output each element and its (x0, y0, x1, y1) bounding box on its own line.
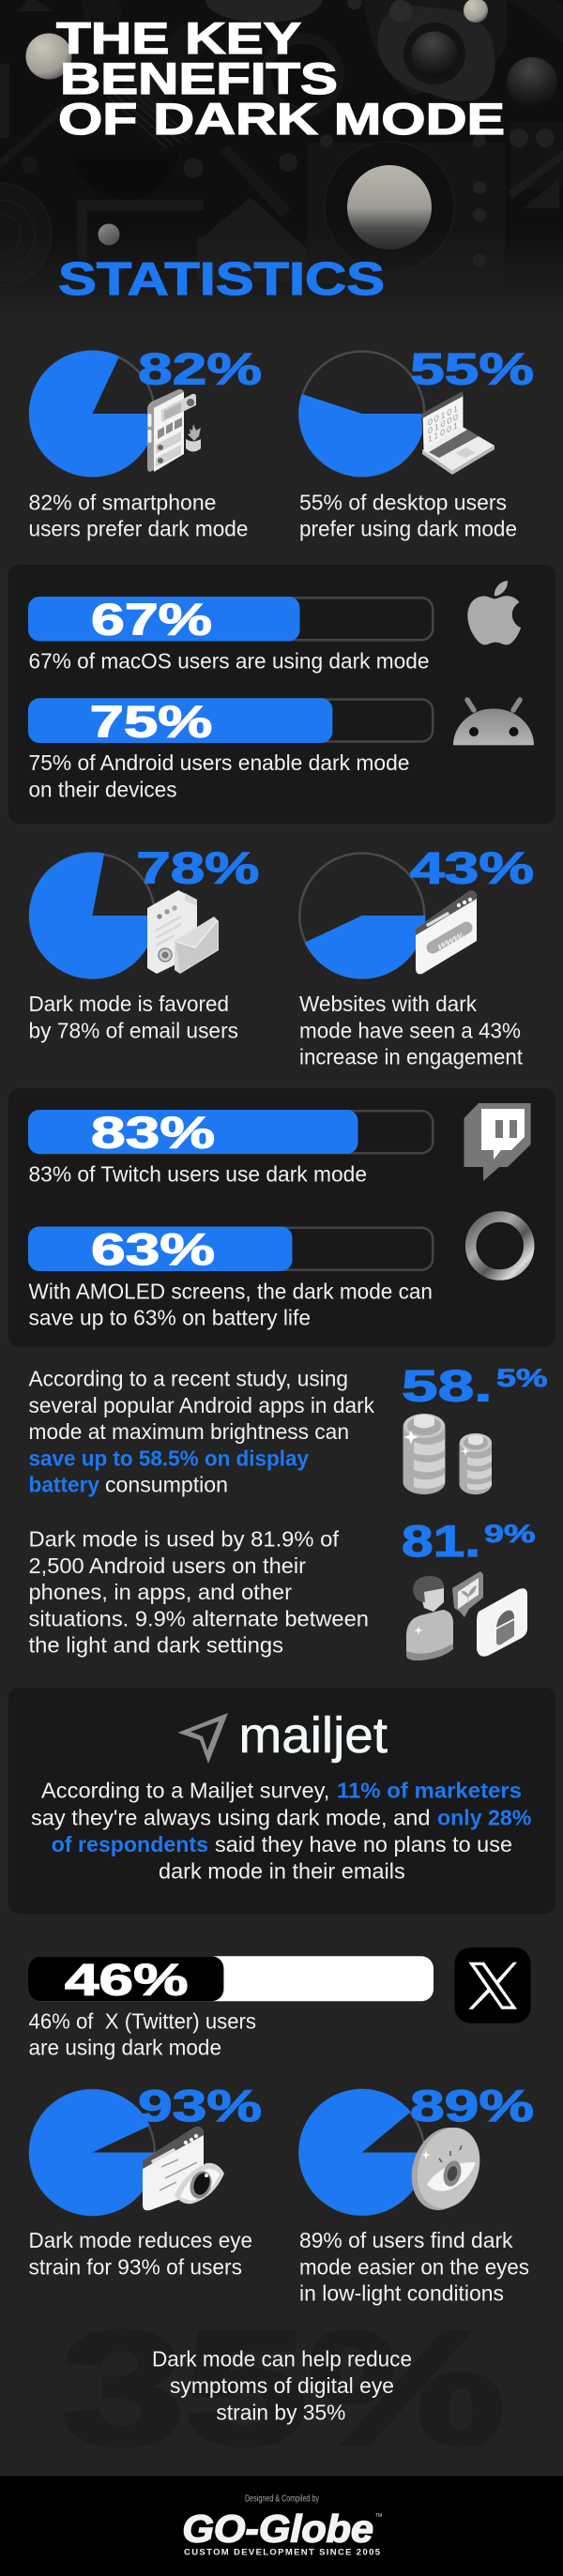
bar: 67% macOS (28, 595, 433, 644)
stat text: 82%: users prefer dark mode (28, 517, 248, 541)
bar: 46% X users (28, 1955, 434, 2005)
text block: display battery study: According to a recent study, using (28, 1366, 348, 1390)
text: 83% Twitch: 83% of Twitch users use dark mode (28, 1161, 367, 1186)
stat text: 43% (299, 992, 523, 1069)
icon: AMOLED ring (471, 1217, 529, 1275)
text block: display battery study: several popular Android apps in dark (28, 1393, 374, 1417)
text block: Android users 81.9%: phones, in apps, and other (28, 1580, 292, 1604)
icon: twitch (464, 1103, 531, 1181)
icon: eye disc (402, 2119, 490, 2219)
stat text: 89%: 89% of users find dark (299, 2228, 513, 2252)
stat text: 82% (28, 490, 248, 541)
figure: 58.5% (402, 1360, 548, 1411)
text block: display battery study: consumption (105, 1472, 228, 1496)
text: 75% Android: on their devices (28, 777, 176, 801)
icon: batteries (403, 1414, 492, 1494)
stat text: 78%: by 78% of email users (28, 1018, 238, 1042)
stat text: 93% (28, 2228, 252, 2279)
icon: person with android tile (406, 1571, 527, 1660)
icon: browser window (416, 891, 477, 974)
text block: Android users 81.9%: situations. 9.9% alternate between (28, 1606, 369, 1630)
icon: code window with eye (143, 2127, 224, 2210)
stat: 78% email users: 78% (136, 843, 259, 893)
text: 46% X users (28, 2009, 256, 2060)
stat text: 55%: 55% of desktop users (299, 490, 507, 514)
stat text: 43%: increase in engagement (299, 1045, 523, 1069)
text: 75% Android (28, 750, 409, 801)
stat text: 55% (299, 490, 517, 541)
stat: 78% email users (29, 843, 259, 978)
text: 63% AMOLED: save up to 63% on battery life (28, 1305, 311, 1329)
heading: statistics: STATISTICS (58, 254, 385, 305)
stat text: 89%: in low-light conditions (299, 2281, 504, 2306)
icon: apple (467, 581, 521, 644)
text block: display battery study: mode at maximum brightness can (28, 1419, 349, 1444)
stat text: 93%: strain for 93% of users (28, 2254, 242, 2279)
icon: document and envelope (147, 890, 219, 974)
text: 63% AMOLED (28, 1280, 433, 1329)
text block: display battery study: save up to 58.5% on display (28, 1446, 309, 1470)
text: survey: said they have no plans to use (215, 1832, 512, 1856)
bar: 63% AMOLED (28, 1224, 433, 1274)
panel: Mailjet survey (8, 1688, 555, 1914)
text: survey: of respondents (52, 1832, 208, 1856)
logo: GO-Globe: GO-Globe (182, 2507, 373, 2550)
text block: Android users 81.9% (28, 1527, 369, 1657)
icon: laptop: 11001 (428, 420, 458, 446)
stat: 89% low-light (298, 2081, 534, 2219)
panel: Twitch and AMOLED (8, 1088, 555, 1347)
stat text: 78%: Dark mode is favored (28, 992, 229, 1016)
bar: 67% macOS: 67% (91, 595, 212, 644)
text: digital eye strain: symptoms of digital eye (170, 2373, 394, 2398)
text: digital eye strain: Dark mode can help reduce (152, 2347, 412, 2371)
text: survey: dark mode in their emails (159, 1858, 405, 1883)
icon: laptop (421, 391, 495, 475)
stat: 93% eye strain: 93% (138, 2081, 262, 2130)
icon: smartphone (147, 389, 201, 472)
figure: 81.9%: 81. (402, 1516, 480, 1566)
logo: GO-Globe: CUSTOM DEVELOPMENT SINCE 2005 (184, 2547, 381, 2557)
text: survey (31, 1779, 531, 1883)
bar: 63% AMOLED: 63% (91, 1224, 215, 1274)
stat text: 89% (299, 2228, 529, 2306)
watermark: 35%: 35% (61, 2298, 505, 2478)
text: survey: 11% of marketers (337, 1779, 522, 1803)
icon: browser window: www. (437, 928, 464, 953)
stat: 55% desktop users (298, 343, 534, 477)
stat: 82% smartphone users: 82% (138, 343, 262, 394)
text: 67% macOS: 67% of macOS users are using dark mode (28, 649, 430, 674)
icon: android (453, 700, 534, 745)
stat: 89% low-light: 89% (410, 2081, 534, 2130)
title: BENEFITS (60, 53, 338, 103)
text block: Android users 81.9%: Dark mode is used by 81.9% of (28, 1527, 339, 1552)
stat: 93% eye strain (29, 2081, 262, 2216)
text: survey: say they're always using dark mode, and (31, 1806, 431, 1830)
text block: display battery study: battery (28, 1472, 99, 1496)
text: digital eye strain: strain by 35% (216, 2400, 345, 2424)
figure: 58.5%: 5% (496, 1364, 548, 1392)
stat text: 89%: mode easier on the eyes (299, 2254, 529, 2279)
bar: 75% Android (28, 697, 433, 747)
stat text: 82%: 82% of smartphone (28, 490, 216, 514)
text: digital eye strain (152, 2347, 412, 2424)
icon: X logo (454, 1947, 531, 2023)
text block: Android users 81.9%: 2,500 Android users on their (28, 1553, 306, 1578)
text: survey: only 28% (437, 1806, 531, 1830)
stat: 43% website engagement: 43% (410, 843, 534, 893)
bar: 83% Twitch (28, 1108, 433, 1158)
text: 46% X users: are using dark mode (28, 2036, 221, 2060)
panel: macOS and Android (8, 565, 555, 824)
logo: GO-Globe: TM (375, 2513, 382, 2519)
title: OF DARK MODE (58, 94, 505, 144)
title: THE KEY (56, 13, 301, 63)
text: 63% AMOLED: With AMOLED screens, the dark mode can (28, 1280, 433, 1304)
text block: Android users 81.9%: the light and dark settings (28, 1632, 283, 1657)
bar: 75% Android: 75% (90, 697, 212, 747)
footer credit: Designed & Compiled by (245, 2494, 319, 2505)
bar: 83% Twitch: 83% (91, 1108, 215, 1158)
text: 46% X users: 46% of X (Twitter) users (28, 2009, 256, 2034)
icon: laptop: 01000 (428, 412, 458, 437)
text block: display battery study (28, 1366, 374, 1496)
bar: 46% X users: 46% (65, 1955, 188, 2005)
figure: 81.9% (402, 1516, 535, 1566)
stat text: 93%: Dark mode reduces eye (28, 2228, 252, 2252)
stat text: 43%: Websites with dark (299, 992, 477, 1016)
text: 75% Android: 75% of Android users enable dark mode (28, 750, 409, 775)
figure: 58.5%: 58. (402, 1360, 492, 1411)
title (56, 13, 505, 144)
stat text: 55%: prefer using dark mode (299, 517, 517, 541)
header decorative background (0, 0, 563, 326)
stat: 55% desktop users: 55% (410, 343, 534, 394)
stat text: 78% (28, 992, 238, 1042)
stat text: 43%: mode have seen a 43% (299, 1018, 521, 1042)
figure: 81.9%: 9% (484, 1520, 535, 1548)
logo: mailjet (177, 1707, 388, 1764)
stat: 43% website engagement (299, 843, 534, 979)
icon: laptop: 00101 (428, 403, 458, 429)
text: survey: According to a Mailjet survey, (41, 1779, 329, 1803)
footer (0, 2476, 563, 2576)
logo: mailjet: mailjet (238, 1707, 388, 1764)
stat: 82% smartphone users (29, 343, 262, 477)
